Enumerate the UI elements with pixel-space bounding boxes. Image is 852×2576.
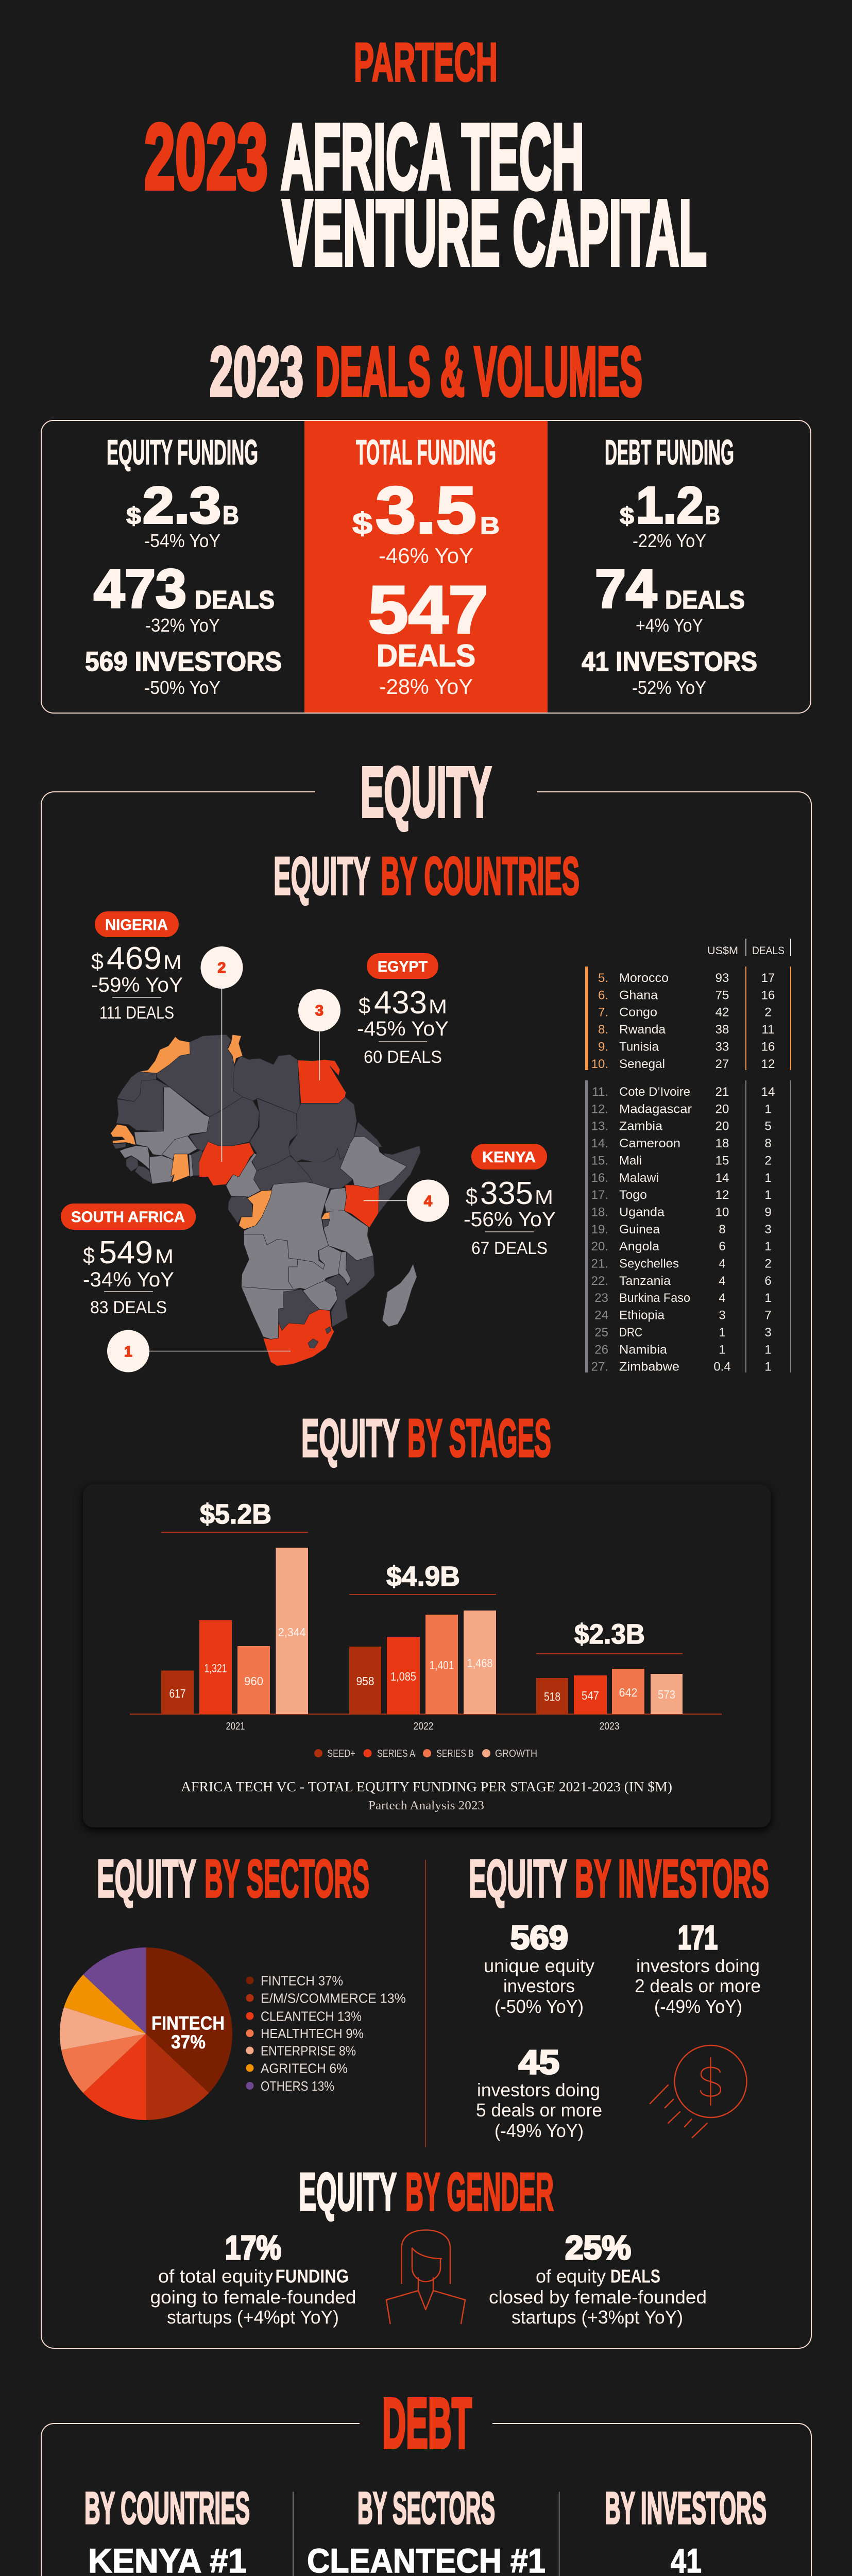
- panel: chart card: [83, 1484, 771, 1827]
- icon: woman founder: [386, 2230, 465, 2324]
- callout: Nigeria: NIGERIA: [105, 917, 168, 934]
- stat: 45 investors doing 5 deals or more: (-49% YoY): [495, 2120, 584, 2141]
- table group: ranks 11 to 27: 14: [715, 1171, 729, 1185]
- table group: ranks 11 to 27: Seychelles: [619, 1257, 679, 1270]
- bars 2023: [536, 1669, 683, 1732]
- stat: 17% of funding to female-founded startups: startups (+4%pt YoY): [167, 2307, 339, 2328]
- bars 2023: 2023: [600, 1721, 619, 1732]
- table: other countries ranking: [585, 939, 791, 1374]
- bars 2023: 518: [544, 1690, 560, 1703]
- pie chart: sectors: FINTECH: [151, 2012, 225, 2034]
- table group: ranks 5 to 10: 8.: [598, 1023, 608, 1037]
- table group: ranks 11 to 27: 8: [764, 1137, 772, 1150]
- bars 2021: 1,321: [204, 1662, 227, 1675]
- column: equity funding: EQUITY FUNDING: [107, 433, 258, 472]
- column: total funding: -28% YoY: [379, 674, 473, 699]
- callout: Kenya: [364, 1144, 556, 1258]
- callout: Nigeria: -59% YoY: [91, 974, 183, 996]
- totals: $4.9B: [386, 1561, 460, 1592]
- callout: Kenya: KENYA: [482, 1149, 536, 1166]
- totals: $5.2B: [200, 1499, 271, 1530]
- table group: ranks 11 to 27: 6: [764, 1274, 772, 1288]
- table group: ranks 11 to 27: [585, 1080, 791, 1374]
- bars 2022: 1,085: [390, 1670, 416, 1683]
- bars 2021: 2,344: [278, 1625, 306, 1639]
- table group: ranks 11 to 27: Tanzania: [619, 1274, 671, 1288]
- table group: ranks 11 to 27: 17.: [591, 1188, 608, 1202]
- bars 2022: 1,401: [430, 1658, 454, 1672]
- column: equity funding: 569 INVESTORS: [85, 647, 282, 677]
- legend: sectors: E/M/S/COMMERCE 13%: [261, 1991, 406, 2006]
- highlighted total funding column: [304, 421, 548, 713]
- callout: Egypt: 60 DEALS: [364, 1047, 442, 1067]
- chart caption: AFRICA TECH VC - TOTAL EQUITY FUNDING PER STAGE 2021-2023 (IN $M): [181, 1779, 672, 1794]
- table group: ranks 11 to 27: 3: [764, 1223, 772, 1236]
- table group: ranks 11 to 27: 21.: [591, 1257, 608, 1270]
- legend: sectors: OTHERS 13%: [261, 2078, 334, 2094]
- stat: 569 unique equity investors: unique equity: [484, 1955, 594, 1976]
- bars 2023: 642: [619, 1686, 638, 1699]
- table group: ranks 5 to 10: Senegal: [619, 1057, 665, 1071]
- table group: ranks 5 to 10: Ghana: [619, 988, 658, 1002]
- table group: ranks 5 to 10: 42: [715, 1006, 729, 1020]
- legend: sectors: [246, 1973, 406, 2094]
- table group: ranks 11 to 27: Mali: [619, 1154, 642, 1167]
- table group: ranks 5 to 10: 12: [761, 1057, 775, 1071]
- heading: equity by sectors: EQUITY: [97, 1849, 196, 1909]
- panel: debt section frame: [41, 2424, 811, 2576]
- bars 2021: 960: [244, 1674, 263, 1688]
- callout: Nigeria: 469: [107, 941, 162, 976]
- bars 2021: 2021: [226, 1721, 245, 1732]
- icon: flying dollar coin: [650, 2045, 747, 2138]
- callout: South Africa: SOUTH AFRICA: [71, 1209, 185, 1226]
- table group: ranks 11 to 27: 1: [764, 1102, 772, 1116]
- table group: ranks 11 to 27: 26: [594, 1343, 608, 1357]
- bar chart: equity funding per stage: [130, 1499, 722, 1732]
- table group: ranks 11 to 27: 10: [715, 1206, 729, 1219]
- heading: equity by investors: [469, 1849, 769, 1909]
- column: equity funding: [85, 433, 282, 698]
- bars 2023: 547: [582, 1689, 599, 1702]
- stat: 45 investors doing 5 deals or more: 45: [519, 2043, 559, 2081]
- stat: 569 unique equity investors: (-50% YoY): [495, 1996, 584, 2017]
- column: total funding: TOTAL FUNDING: [356, 433, 496, 472]
- table group: ranks 5 to 10: 38: [715, 1023, 729, 1037]
- table group: ranks 5 to 10: 7.: [598, 1006, 608, 1020]
- heading: equity by countries: EQUITY: [274, 846, 370, 906]
- marker: 2: [201, 946, 243, 1162]
- text: BY STAGES: [407, 1409, 551, 1468]
- callout: South Africa: 83 DEALS: [90, 1298, 167, 1317]
- legend: sectors: FINTECH 37%: [261, 1973, 343, 1989]
- table group: ranks 11 to 27: Cameroon: [619, 1137, 680, 1150]
- column: total funding: 547: [368, 572, 488, 647]
- chart legend: [314, 1748, 537, 1759]
- bars 2022: 1,468: [467, 1656, 492, 1670]
- table group: ranks 5 to 10: 2: [764, 1006, 772, 1020]
- stat: 25% of deals by female-founded startups: [489, 2229, 707, 2328]
- table group: ranks 5 to 10: Morocco: [619, 971, 669, 985]
- text: EQUITY: [361, 753, 491, 832]
- text: DEBT: [382, 2384, 472, 2463]
- stat: 171 investors doing 2 deals or more: [635, 1919, 761, 2017]
- stat: 17% of funding to female-founded startups: going to female-founded: [150, 2286, 356, 2308]
- table group: ranks 11 to 27: 20.: [591, 1240, 608, 1253]
- table group: ranks 5 to 10: 27: [715, 1057, 729, 1071]
- bars 2021: 617: [169, 1687, 185, 1700]
- table group: ranks 11 to 27: 4: [719, 1274, 726, 1288]
- table group: ranks 11 to 27: Cote D’Ivoire: [619, 1085, 690, 1099]
- marker: 3: 3: [315, 1003, 323, 1019]
- marker: 1: 1: [124, 1344, 132, 1360]
- stat: 569 unique equity investors: [484, 1919, 594, 2017]
- marker: 4: 4: [424, 1193, 432, 1210]
- callout: Kenya: 67 DEALS: [471, 1239, 548, 1258]
- column: debt funding: -22% YoY: [633, 530, 706, 551]
- stat: 25% of deals by female-founded startups: closed by female-founded: [489, 2286, 707, 2308]
- table group: ranks 11 to 27: 23: [594, 1291, 608, 1305]
- table group: ranks 11 to 27: Uganda: [619, 1206, 665, 1219]
- callout: South Africa: -34% YoY: [83, 1268, 174, 1291]
- title: 2023 Africa Tech Venture Capital: [144, 105, 707, 285]
- chart legend: SERIES B: [437, 1748, 474, 1759]
- table group: ranks 5 to 10: 16: [761, 1040, 775, 1054]
- table group: ranks 5 to 10: [585, 967, 791, 1071]
- heading: 2023 deals and volumes: 2023: [210, 332, 303, 411]
- column: total funding: B: [480, 512, 500, 539]
- column: debt funding: [582, 433, 757, 698]
- stat: 45 investors doing 5 deals or more: investors doing: [477, 2079, 600, 2100]
- table group: ranks 11 to 27: 5: [764, 1120, 772, 1133]
- chart caption: Partech Analysis 2023: [368, 1799, 484, 1812]
- marker: 2: 2: [217, 960, 226, 976]
- table group: ranks 5 to 10: 75: [715, 988, 729, 1002]
- column: equity funding: DEALS: [195, 586, 275, 614]
- stat: 17% of funding to female-founded startups: [150, 2229, 356, 2328]
- panel: equity section frame: [41, 792, 811, 2348]
- table group: ranks 11 to 27: 9: [764, 1206, 772, 1219]
- column: equity funding: -50% YoY: [144, 677, 220, 698]
- stat: 171 investors doing 2 deals or more: (-49% YoY): [654, 1996, 742, 2017]
- table group: ranks 11 to 27: Angola: [619, 1240, 660, 1253]
- stat: 171 investors doing 2 deals or more: 171: [678, 1919, 718, 1956]
- table group: ranks 11 to 27: 12: [715, 1188, 729, 1202]
- text: BY SECTORS: [205, 1849, 369, 1909]
- stat: 25% of deals by female-founded startups: 25%: [565, 2229, 631, 2266]
- heading: equity by stages: EQUITY: [301, 1409, 400, 1468]
- heading: equity by investors: EQUITY: [469, 1849, 567, 1909]
- callout: South Africa: M: [155, 1246, 174, 1268]
- totals: [161, 1499, 683, 1654]
- chart legend: SEED+: [327, 1748, 355, 1759]
- stat: 25% of deals by female-founded startups: startups (+3%pt YoY): [512, 2307, 683, 2328]
- stat: 569 unique equity investors: investors: [503, 1975, 575, 1996]
- column: total funding: 3.5: [376, 473, 476, 547]
- callout: Nigeria: 111 DEALS: [99, 1003, 174, 1023]
- legend: sectors: ENTERPRISE 8%: [261, 2043, 356, 2059]
- table group: ranks 11 to 27: 1: [764, 1343, 772, 1357]
- table group: ranks 5 to 10: 93: [715, 971, 729, 985]
- stat: 17% of funding to female-founded startups: of total equity: [158, 2266, 273, 2286]
- column: debt funding: B: [705, 501, 720, 530]
- column: debt funding: $: [620, 502, 634, 529]
- table group: ranks 5 to 10: Rwanda: [619, 1023, 666, 1037]
- table group: ranks 11 to 27: 13.: [591, 1120, 608, 1133]
- table group: ranks 11 to 27: 4: [719, 1291, 726, 1305]
- column: total funding: -46% YoY: [379, 544, 473, 568]
- callout: South Africa: [61, 1204, 291, 1372]
- column: equity funding: -54% YoY: [144, 530, 220, 551]
- column: equity funding: $: [126, 502, 141, 529]
- column: equity funding: -32% YoY: [145, 615, 220, 636]
- table group: ranks 5 to 10: Tunisia: [619, 1040, 659, 1054]
- stat: 45 investors doing 5 deals or more: 5 deals or more: [476, 2099, 602, 2121]
- bars 2021: [161, 1548, 308, 1732]
- bars 2022: 2022: [413, 1721, 434, 1732]
- table group: ranks 5 to 10: 17: [761, 971, 775, 985]
- table group: ranks 11 to 27: 18.: [591, 1206, 608, 1219]
- table group: ranks 11 to 27: 19.: [591, 1223, 608, 1236]
- callout: Kenya: 335: [480, 1176, 533, 1211]
- column: equity funding: 473: [94, 558, 186, 619]
- marker: 1: [107, 1330, 291, 1372]
- table group: ranks 11 to 27: DRC: [619, 1326, 642, 1340]
- table group: ranks 5 to 10: 33: [715, 1040, 729, 1054]
- heading: 2023 deals and volumes: [210, 332, 642, 411]
- table group: ranks 11 to 27: 15.: [591, 1154, 608, 1167]
- table group: ranks 11 to 27: Ethiopia: [619, 1309, 665, 1323]
- stat: 17% of funding to female-founded startups: 17%: [225, 2229, 281, 2266]
- table group: ranks 11 to 27: 3: [764, 1326, 772, 1340]
- legend: sectors: HEALTHTECH 9%: [261, 2026, 364, 2041]
- text: BY GENDER: [405, 2162, 554, 2222]
- table group: ranks 5 to 10: 11: [762, 1023, 774, 1037]
- column: debt funding: 41 INVESTORS: [582, 647, 757, 677]
- column: debt by countries: BY COUNTRIES: [84, 2483, 250, 2533]
- table group: ranks 5 to 10: 6.: [598, 988, 608, 1002]
- table group: ranks 5 to 10: 9.: [598, 1040, 608, 1054]
- table group: ranks 11 to 27: 22.: [591, 1274, 608, 1288]
- table group: ranks 11 to 27: 1: [764, 1171, 772, 1185]
- table group: ranks 11 to 27: 3: [719, 1309, 726, 1323]
- table group: ranks 11 to 27: 14: [761, 1085, 775, 1099]
- panel: deals and volumes summary: [41, 420, 811, 713]
- totals: $2.3B: [574, 1619, 645, 1650]
- stat: 17% of funding to female-founded startups: FUNDING: [275, 2266, 349, 2286]
- callout: Kenya: M: [535, 1187, 553, 1209]
- table group: ranks 11 to 27: Burkina Faso: [619, 1291, 690, 1305]
- callout: South Africa: $: [83, 1243, 95, 1268]
- marker: 3: [298, 989, 340, 1080]
- table group: ranks 11 to 27: 14.: [591, 1137, 608, 1150]
- logo: PARTECH: PARTECH: [354, 32, 498, 93]
- table header: [707, 939, 791, 957]
- column: debt by sectors: BY SECTORS: [357, 2483, 495, 2533]
- callout: Egypt: $: [359, 993, 370, 1019]
- table group: ranks 11 to 27: 4: [719, 1257, 726, 1270]
- stat: 25% of deals by female-founded startups: DEALS: [610, 2266, 660, 2286]
- column: equity funding: 2.3: [143, 477, 221, 534]
- table group: ranks 11 to 27: 0.4: [713, 1360, 731, 1374]
- table group: ranks 11 to 27: 8: [719, 1223, 726, 1236]
- stat: 25% of deals by female-founded startups: of equity: [536, 2266, 606, 2286]
- table group: ranks 11 to 27: Malawi: [619, 1171, 659, 1185]
- column: debt funding: DEALS: [665, 586, 745, 614]
- callout: Egypt: [298, 953, 449, 1080]
- table group: ranks 11 to 27: 15: [715, 1154, 729, 1167]
- table group: ranks 11 to 27: Togo: [619, 1188, 647, 1202]
- table group: ranks 11 to 27: 20: [715, 1120, 729, 1133]
- table header: US$M: [707, 945, 738, 957]
- column: debt by countries: [63, 2483, 270, 2576]
- legend: sectors: CLEANTECH 13%: [261, 2008, 362, 2024]
- pie chart: sectors: 37%: [171, 2031, 206, 2053]
- pie chart: sectors: [60, 1947, 232, 2120]
- bars 2023: 573: [658, 1688, 675, 1701]
- table group: ranks 11 to 27: Namibia: [619, 1343, 668, 1357]
- legend: sectors: AGRITECH 6%: [261, 2061, 348, 2076]
- text: BY COUNTRIES: [381, 846, 580, 906]
- column: debt by sectors: [307, 2483, 546, 2576]
- table group: ranks 11 to 27: Madagascar: [619, 1102, 692, 1116]
- table header: DEALS: [752, 945, 785, 957]
- stat: 45 investors doing 5 deals or more: [476, 2043, 602, 2141]
- column: debt funding: +4% YoY: [636, 615, 703, 636]
- table group: ranks 11 to 27: 1: [719, 1343, 726, 1357]
- title: 2023 Africa Tech Venture Capital: 2023: [144, 105, 268, 209]
- table group: ranks 11 to 27: 1: [764, 1291, 772, 1305]
- table group: ranks 11 to 27: 20: [715, 1102, 729, 1116]
- column: total funding: $: [352, 507, 372, 540]
- callout: Nigeria: M: [163, 952, 182, 974]
- column: total funding: DEALS: [377, 638, 475, 673]
- chart caption: [181, 1779, 672, 1812]
- column: equity funding: B: [223, 501, 239, 530]
- bars 2022: 958: [356, 1674, 374, 1688]
- callout: Egypt: 433: [374, 985, 427, 1021]
- callout: Egypt: M: [429, 996, 447, 1018]
- table group: ranks 11 to 27: 1: [764, 1240, 772, 1253]
- column: debt funding: 1.2: [636, 477, 704, 534]
- table group: ranks 5 to 10: Congo: [619, 1006, 657, 1020]
- table group: ranks 11 to 27: 1: [764, 1360, 772, 1374]
- stat: 569 unique equity investors: 569: [510, 1919, 568, 1956]
- column: debt funding: -52% YoY: [632, 677, 706, 698]
- table group: ranks 11 to 27: 16.: [591, 1171, 608, 1185]
- table group: ranks 11 to 27: 7: [764, 1309, 772, 1323]
- table group: ranks 11 to 27: 2: [764, 1257, 772, 1270]
- callout: Egypt: EGYPT: [378, 958, 428, 975]
- callout: Nigeria: $: [91, 949, 104, 974]
- map: Africa by country: [111, 1035, 421, 1366]
- heading: equity by countries: [274, 846, 580, 906]
- column: debt by investors: [600, 2483, 775, 2576]
- stat: 171 investors doing 2 deals or more: investors doing: [636, 1955, 760, 1976]
- table group: ranks 11 to 27: Guinea: [619, 1223, 660, 1236]
- table group: ranks 5 to 10: 16: [761, 988, 775, 1002]
- chart legend: SERIES A: [377, 1748, 416, 1759]
- table group: ranks 5 to 10: 5.: [598, 971, 608, 985]
- table group: ranks 11 to 27: 12.: [591, 1102, 608, 1116]
- table group: ranks 11 to 27: Zambia: [619, 1120, 663, 1133]
- table group: ranks 11 to 27: 1: [764, 1188, 772, 1202]
- table group: ranks 11 to 27: Zimbabwe: [619, 1360, 679, 1374]
- callout: Kenya: $: [466, 1184, 478, 1209]
- table group: ranks 11 to 27: 11.: [592, 1085, 608, 1099]
- table group: ranks 5 to 10: 10.: [591, 1057, 608, 1071]
- column: total funding: [352, 433, 500, 699]
- table group: ranks 11 to 27: 25: [594, 1326, 608, 1340]
- table group: ranks 11 to 27: 21: [715, 1085, 729, 1099]
- chart legend: GROWTH: [495, 1748, 537, 1759]
- table group: ranks 11 to 27: 18: [715, 1137, 729, 1150]
- table group: ranks 11 to 27: 6: [719, 1240, 726, 1253]
- callout: South Africa: 549: [99, 1235, 153, 1270]
- stat: 171 investors doing 2 deals or more: 2 deals or more: [635, 1975, 761, 1996]
- callout: Nigeria: [91, 911, 243, 1162]
- callout: Kenya: -56% YoY: [464, 1208, 556, 1231]
- marker: 4: [364, 1180, 449, 1222]
- callout: Egypt: -45% YoY: [357, 1018, 449, 1040]
- table group: ranks 11 to 27: 24: [594, 1309, 608, 1323]
- column: debt funding: 74: [595, 558, 657, 619]
- table group: ranks 11 to 27: 27.: [591, 1360, 608, 1374]
- heading: equity by gender: EQUITY: [299, 2162, 397, 2222]
- table group: ranks 11 to 27: 1: [719, 1326, 726, 1340]
- bars 2022: [349, 1611, 496, 1732]
- table group: ranks 11 to 27: 2: [764, 1154, 772, 1167]
